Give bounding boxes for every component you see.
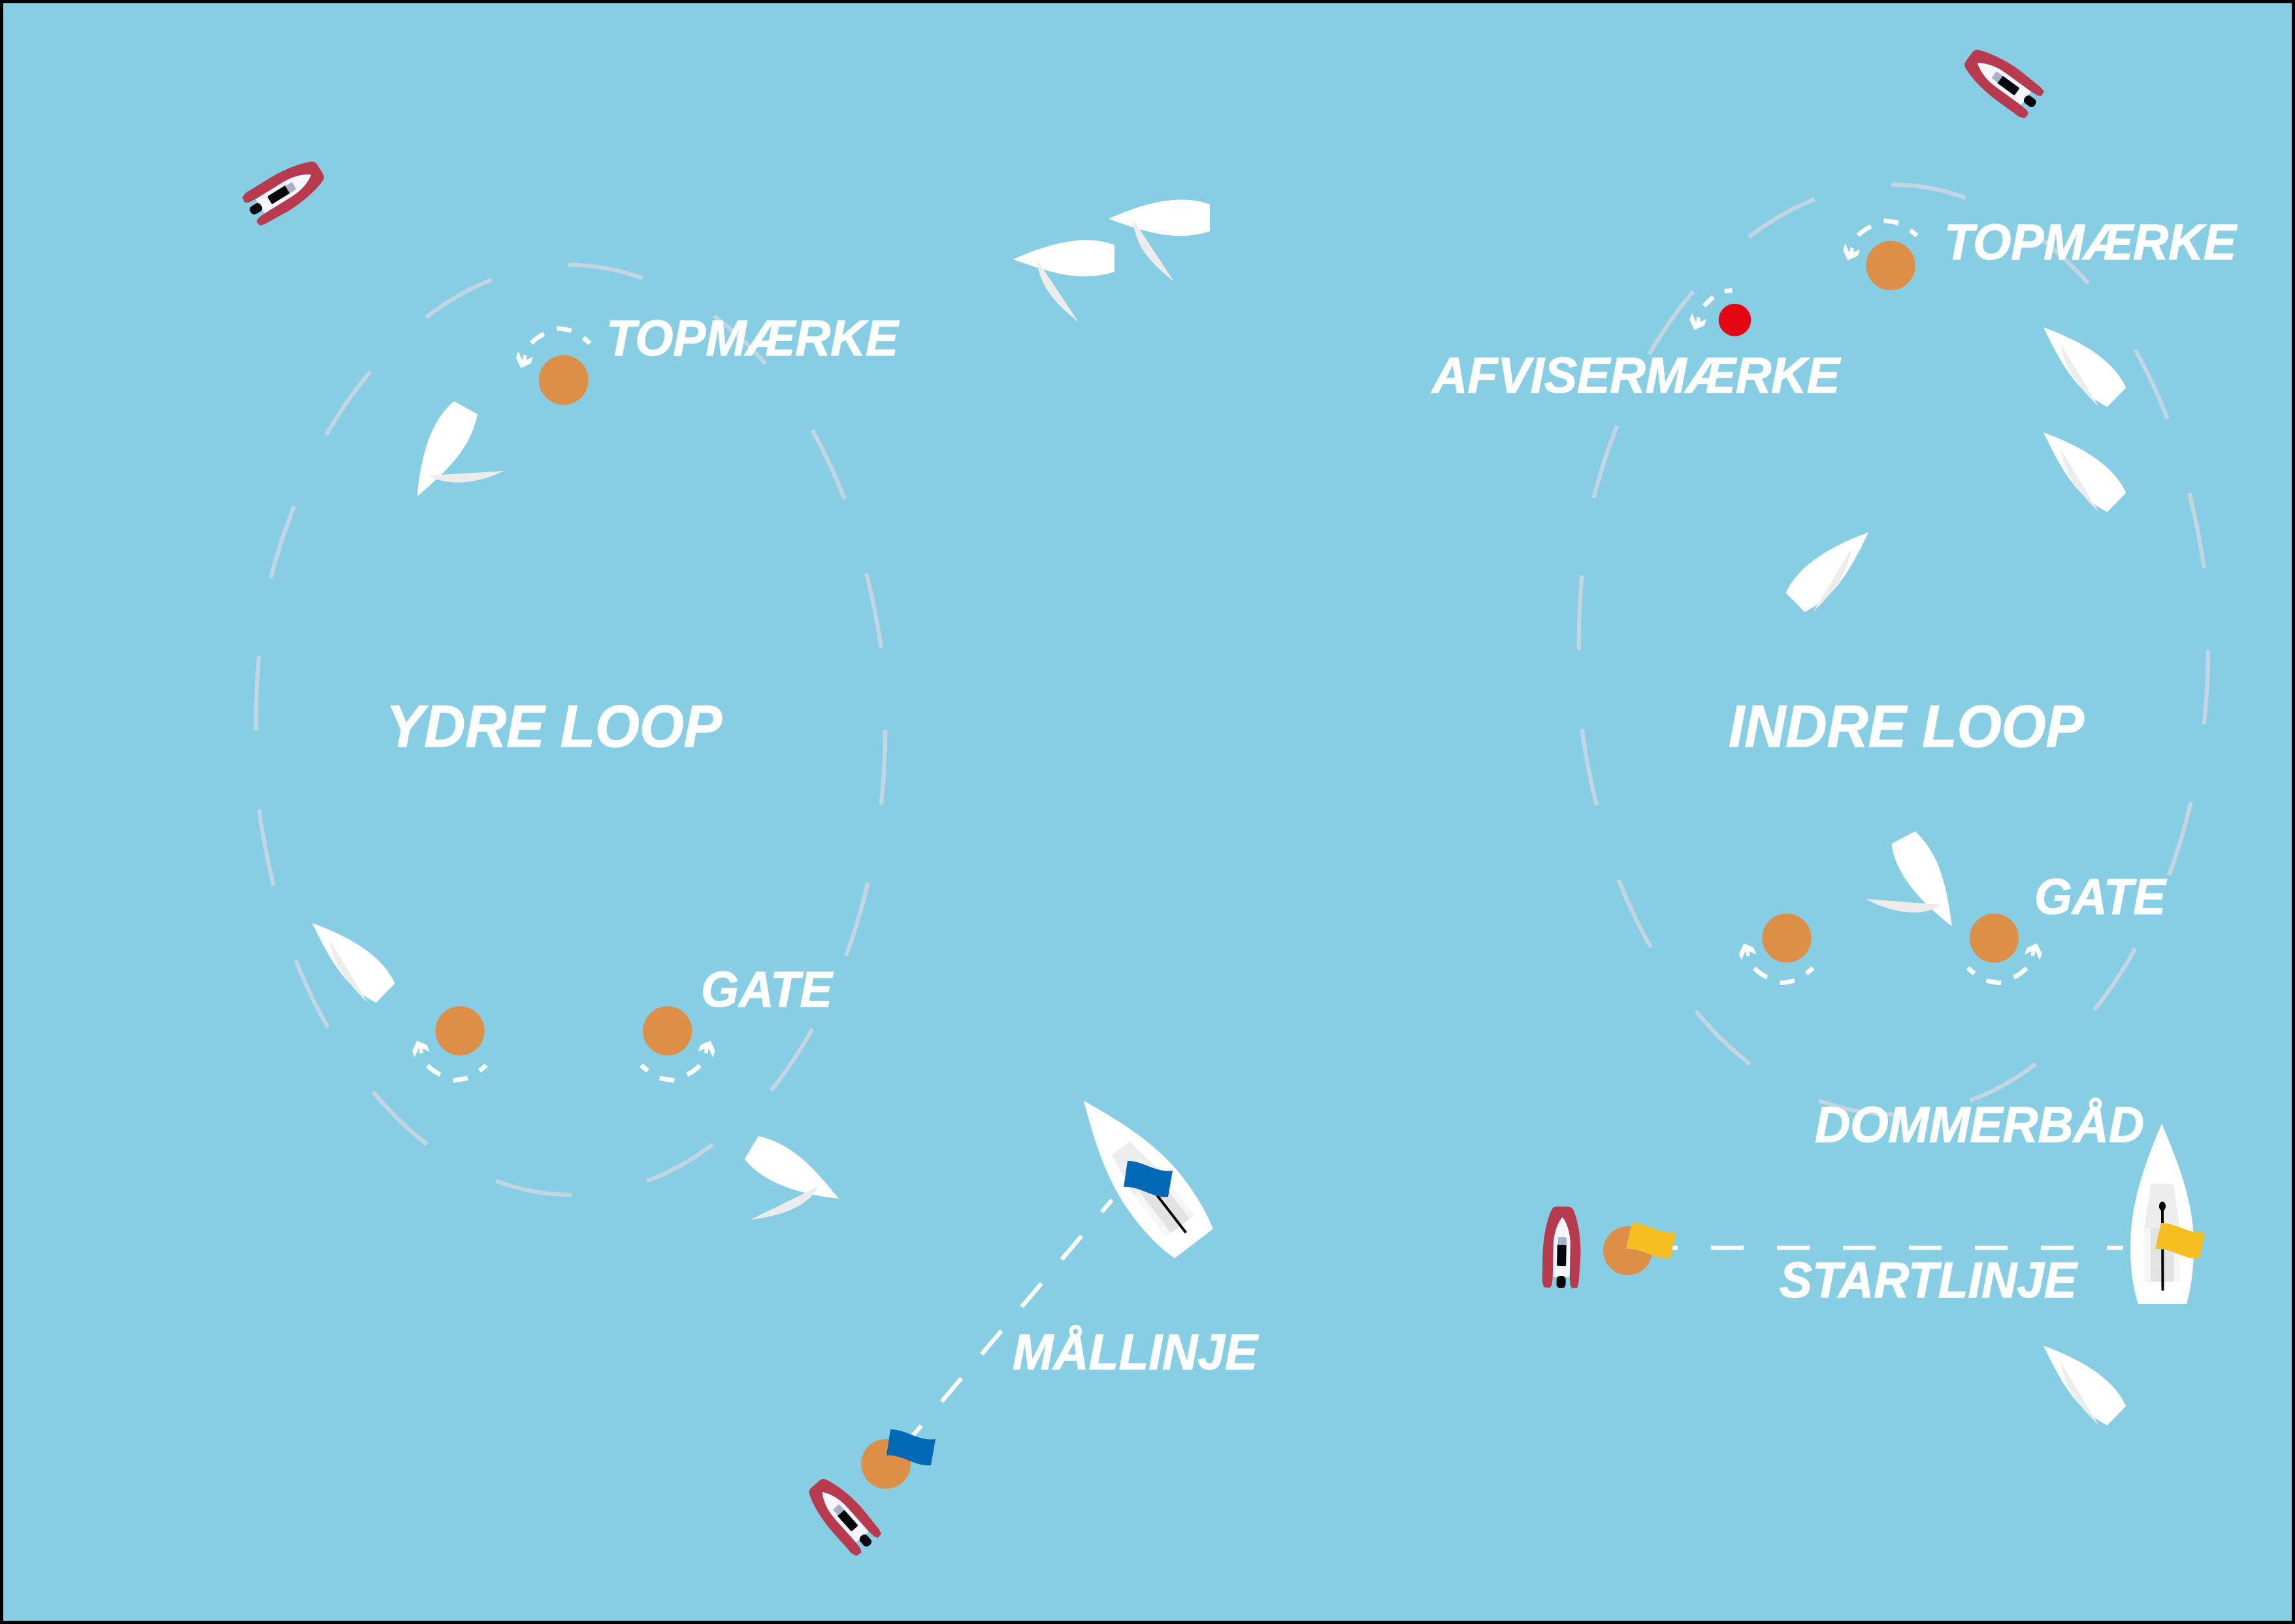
committee boat: finish line <box>1059 1081 1219 1263</box>
label: outer gate: GATE <box>701 962 834 1018</box>
label: finish line: MÅLLINJE <box>1013 1324 1260 1380</box>
mark: outer top mark with rounding arrow <box>516 329 590 405</box>
mark: inner top mark <box>1843 221 1917 290</box>
flag: yellow at start pin <box>1626 1223 1676 1259</box>
flag: blue on committee boat <box>1124 1161 1173 1197</box>
mark: outer gate right <box>642 1006 715 1080</box>
dinghy: inner loop upper <box>2032 314 2130 410</box>
label: inner loop: INDRE LOOP <box>1729 694 2084 760</box>
finish line dashes <box>913 1200 1112 1436</box>
dinghy: inner loop second <box>2032 419 2130 515</box>
mark: outer gate left <box>412 1006 486 1080</box>
dinghy: inner gate <box>1866 829 1967 935</box>
dinghy: top centre right <box>1109 199 1210 282</box>
buoy: finish pin <box>861 1439 911 1489</box>
mark: inner gate right <box>1968 913 2042 983</box>
dinghy: top centre left <box>1013 240 1115 322</box>
label: inner gate: GATE <box>2034 869 2168 925</box>
mark: red offset mark <box>1689 290 1751 336</box>
start line dashes <box>1645 1246 2123 1250</box>
dinghy: outer loop bottom right <box>742 1132 847 1220</box>
flag: blue at finish pin <box>887 1429 936 1465</box>
label: committee boat: DOMMERBÅD <box>1815 1097 2144 1153</box>
rescue boat: top left <box>240 153 330 228</box>
dinghy: inner loop mirrored <box>1782 519 1880 615</box>
rescue boat: top right <box>1958 42 2046 120</box>
label: outer loop: YDRE LOOP <box>386 694 722 760</box>
rescue boat: near finish line <box>801 1472 884 1558</box>
outer loop dashed course <box>256 265 885 1195</box>
dinghy: below start line <box>2032 1332 2130 1429</box>
flag: yellow on committee boat <box>2155 1223 2205 1259</box>
mark: inner gate left <box>1739 913 1813 983</box>
label: offset mark: AFVISERMÆRKE <box>1431 348 1842 404</box>
buoy: start pin <box>1603 1226 1652 1275</box>
label: start line: STARTLINJE <box>1780 1252 2079 1308</box>
dinghy: outer loop left <box>301 909 399 1006</box>
rescue boat: near start line <box>1542 1206 1582 1289</box>
inner loop dashed course <box>1579 184 2208 1114</box>
dinghy: outer loop top <box>400 398 504 505</box>
committee boat: start line <box>2130 1124 2194 1304</box>
label: inner top mark: TOPMÆRKE <box>1944 214 2238 270</box>
label: outer top mark: TOPMÆRKE <box>606 310 900 366</box>
